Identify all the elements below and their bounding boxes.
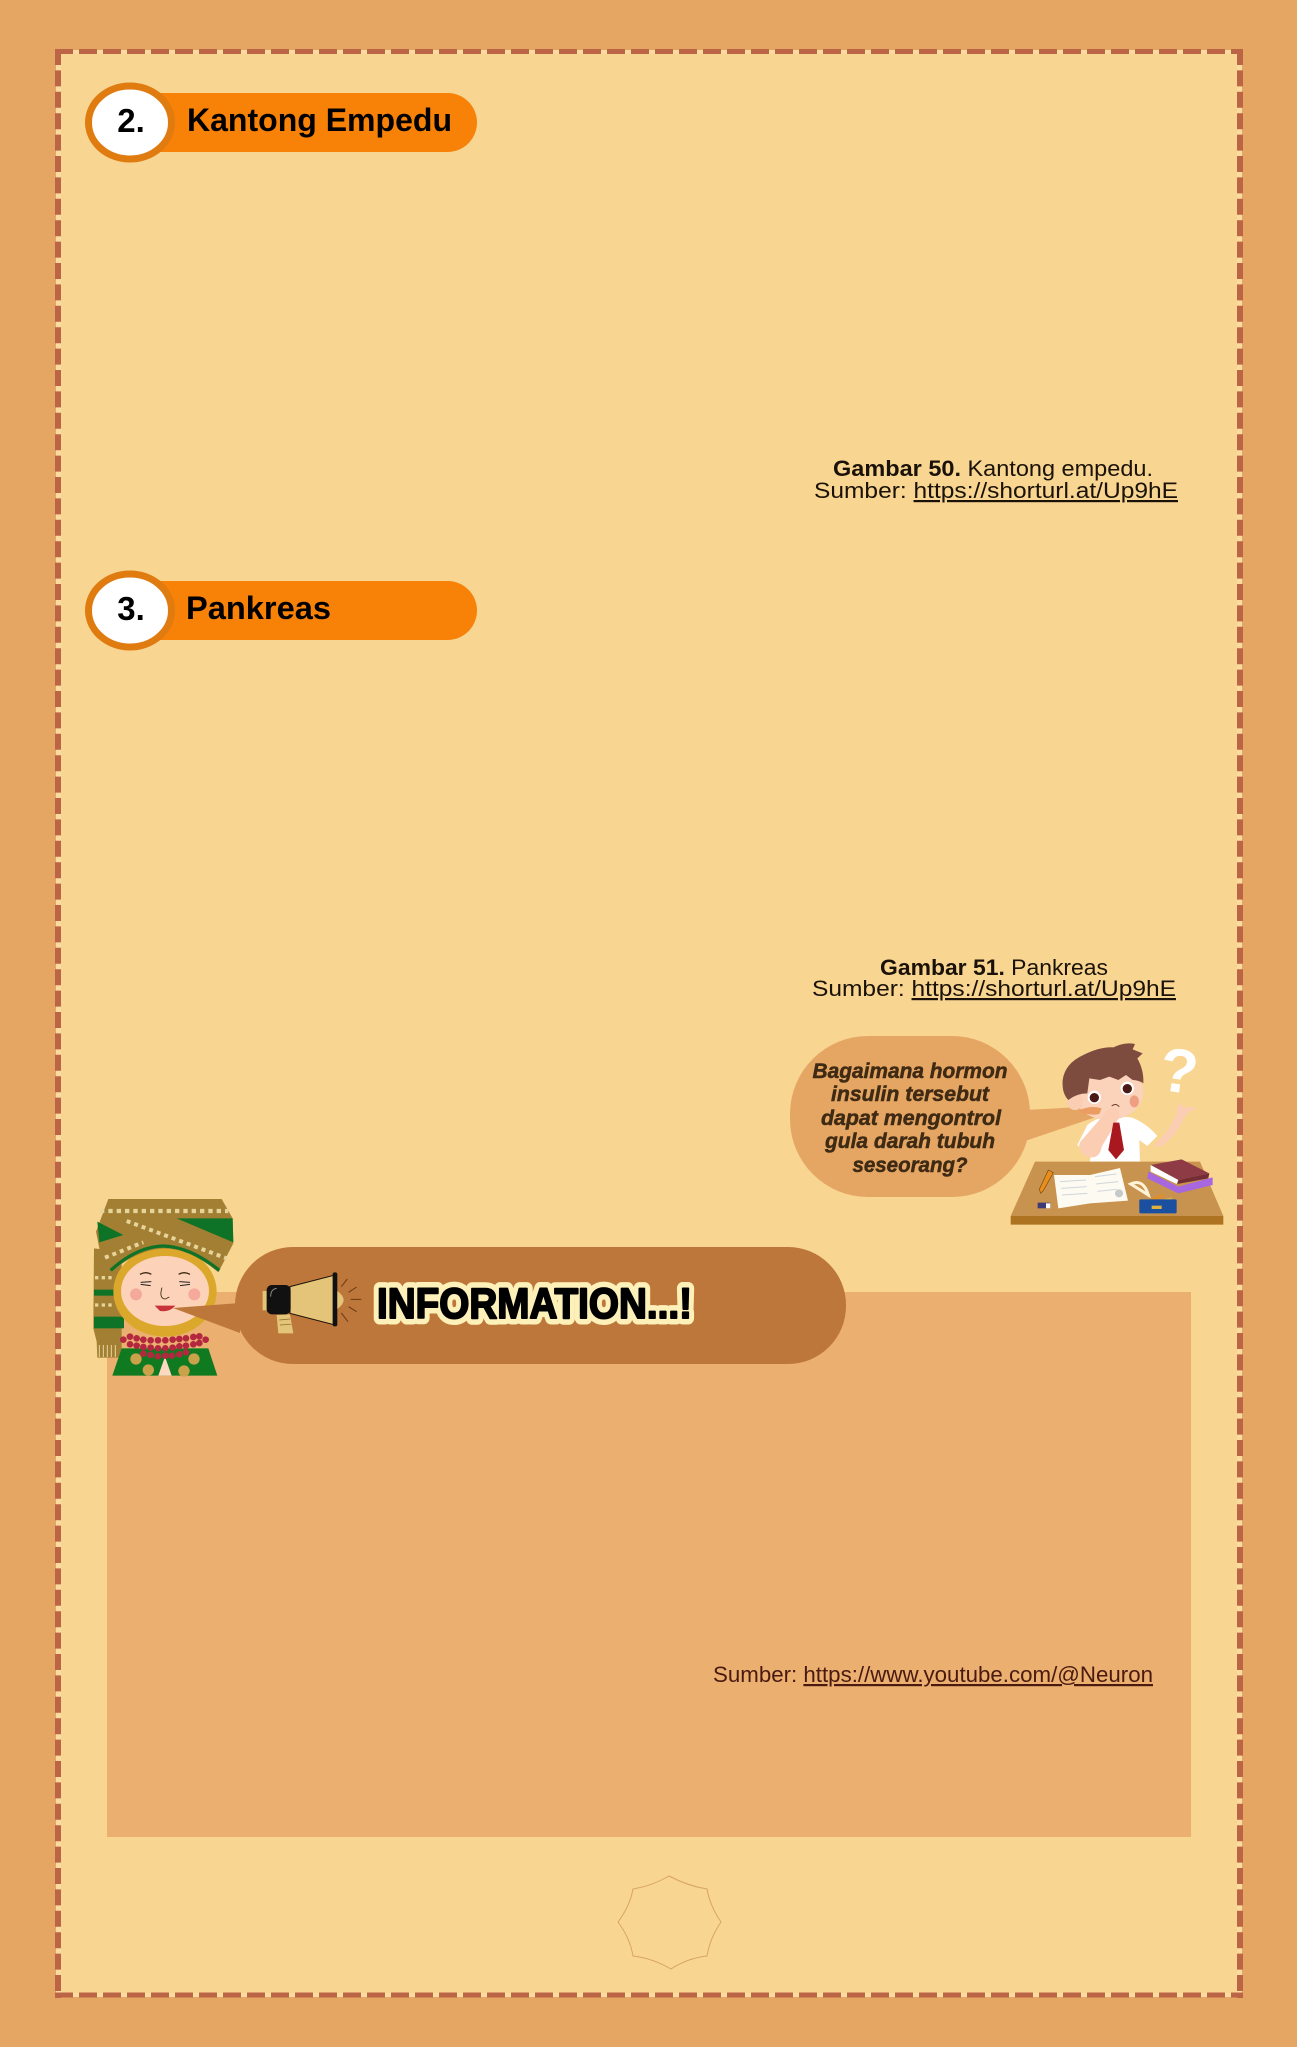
- source link: YouTube: Sumber: https://www.youtube.com/@Neuron: [713, 1662, 1153, 1687]
- books: [1147, 1172, 1213, 1193]
- icon: megaphone: [263, 1272, 361, 1333]
- face: [121, 1256, 209, 1326]
- protractor: [1131, 1183, 1148, 1195]
- mouth: [155, 1306, 175, 1311]
- illustration: student at desk: [1011, 1043, 1223, 1225]
- speech bubble: question: dapat mengontrol: [821, 1106, 1002, 1130]
- hand on chin: [1079, 1108, 1120, 1157]
- caption: Gambar 50: Sumber: https://shorturl.at/Up9hE: [814, 478, 1178, 503]
- turban: [96, 1199, 233, 1272]
- pencil case: [1148, 1195, 1163, 1201]
- text: INFORMATION...!: INFORMATION...!: [377, 1280, 692, 1328]
- heading: Kantong Empedu: Kantong Empedu: [187, 102, 452, 138]
- tie: [1108, 1123, 1124, 1159]
- speech bubble: question: gula darah tubuh: [824, 1129, 995, 1153]
- shirt: [1077, 1116, 1157, 1162]
- eyes: [141, 1282, 190, 1286]
- eyes: [1088, 1091, 1101, 1104]
- nose: [161, 1288, 169, 1299]
- heading: Kantong Empedu: [88, 86, 477, 159]
- back drape: [93, 1248, 122, 1358]
- eraser: [1038, 1203, 1050, 1208]
- face: [1073, 1063, 1143, 1120]
- caption: Gambar 51: [812, 955, 1176, 1001]
- panel: information box: [107, 1292, 1191, 1837]
- heading: Pankreas: [88, 574, 477, 647]
- caption: Gambar 51: Gambar 51. Pankreas: [880, 955, 1108, 980]
- pencil: [1039, 1170, 1053, 1193]
- body: [112, 1348, 217, 1376]
- caption: Gambar 50: [814, 456, 1178, 503]
- open notebook: [1054, 1168, 1128, 1208]
- cheeks: [130, 1288, 142, 1300]
- banner: information speech bubble: [173, 1247, 846, 1364]
- decorative page-number star: [618, 1876, 721, 1969]
- icon: question mark: ?: [1155, 1035, 1202, 1108]
- speech bubble: question: insulin tersebut: [831, 1082, 990, 1106]
- heading: Pankreas: Pankreas: [186, 590, 331, 626]
- speech bubble: question: [790, 1036, 1102, 1197]
- hair: [1063, 1043, 1143, 1100]
- caption: Gambar 50: Gambar 50. Kantong empedu.: [833, 456, 1153, 481]
- speech bubble: question: seseorang?: [852, 1153, 968, 1177]
- desk: [1011, 1162, 1223, 1216]
- heading: Pankreas: 3.: [117, 590, 145, 627]
- illustration: Minang woman: [93, 1199, 233, 1377]
- text: INFORMATION...!: INFORMATION...!: [377, 1280, 692, 1328]
- right arm and hand: [1154, 1113, 1184, 1147]
- necklace beads: [120, 1333, 209, 1360]
- hands: [158, 1357, 172, 1376]
- heading: Kantong Empedu: 2.: [117, 102, 145, 139]
- caption: Gambar 51: Sumber: https://shorturl.at/Up9hE: [812, 976, 1176, 1001]
- speech bubble: question: Bagaimana hormon: [812, 1059, 1008, 1083]
- hijab: [113, 1247, 217, 1337]
